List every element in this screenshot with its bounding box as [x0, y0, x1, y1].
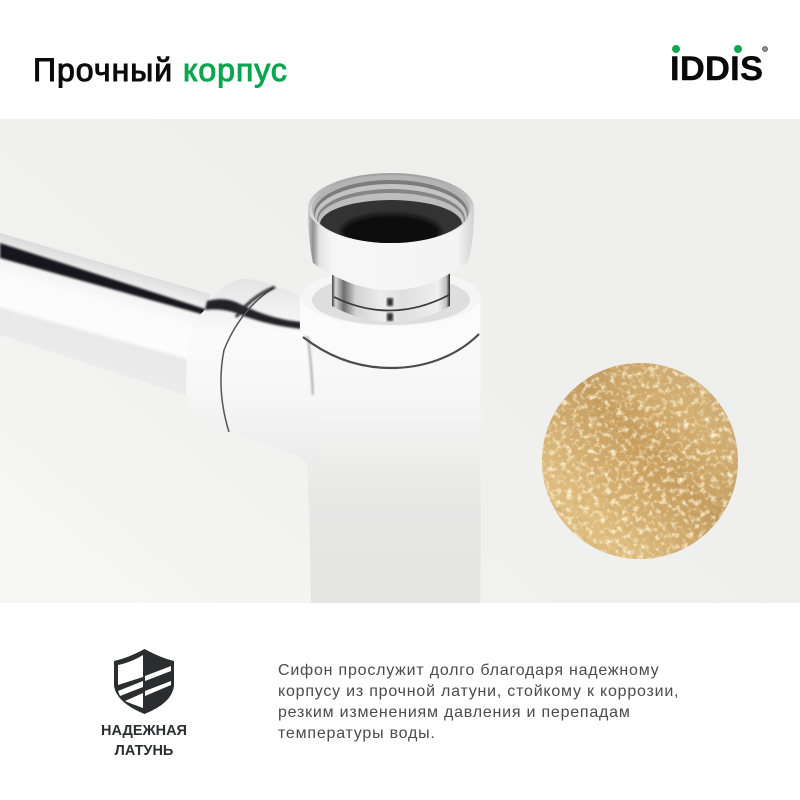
neck — [332, 262, 450, 322]
horizontal pipe — [0, 233, 210, 400]
threaded nut — [308, 173, 474, 290]
badge label: ЛАТУНЬ — [115, 743, 173, 759]
badge label: НАДЕЖНАЯ — [101, 723, 187, 739]
description text: резким изменениям давления и перепадам — [278, 704, 631, 721]
description text: температуры воды. — [278, 725, 436, 742]
description text: корпусу из прочной латуни, стойкому к коррозии, — [278, 683, 679, 700]
product photo panel — [0, 119, 800, 603]
title: Прочный корпус — [33, 52, 288, 88]
logo: IDDIS: IDDIS — [670, 50, 763, 88]
badge label — [101, 723, 187, 759]
description text: Сифон прослужит долго благодаря надежному — [278, 662, 659, 679]
icon: shield — [114, 649, 174, 714]
brass sphere — [540, 361, 740, 561]
background — [0, 119, 800, 603]
vertical body — [302, 300, 480, 603]
description text — [278, 662, 679, 742]
elbow collar — [186, 279, 320, 464]
ring disc with groove — [300, 268, 481, 368]
